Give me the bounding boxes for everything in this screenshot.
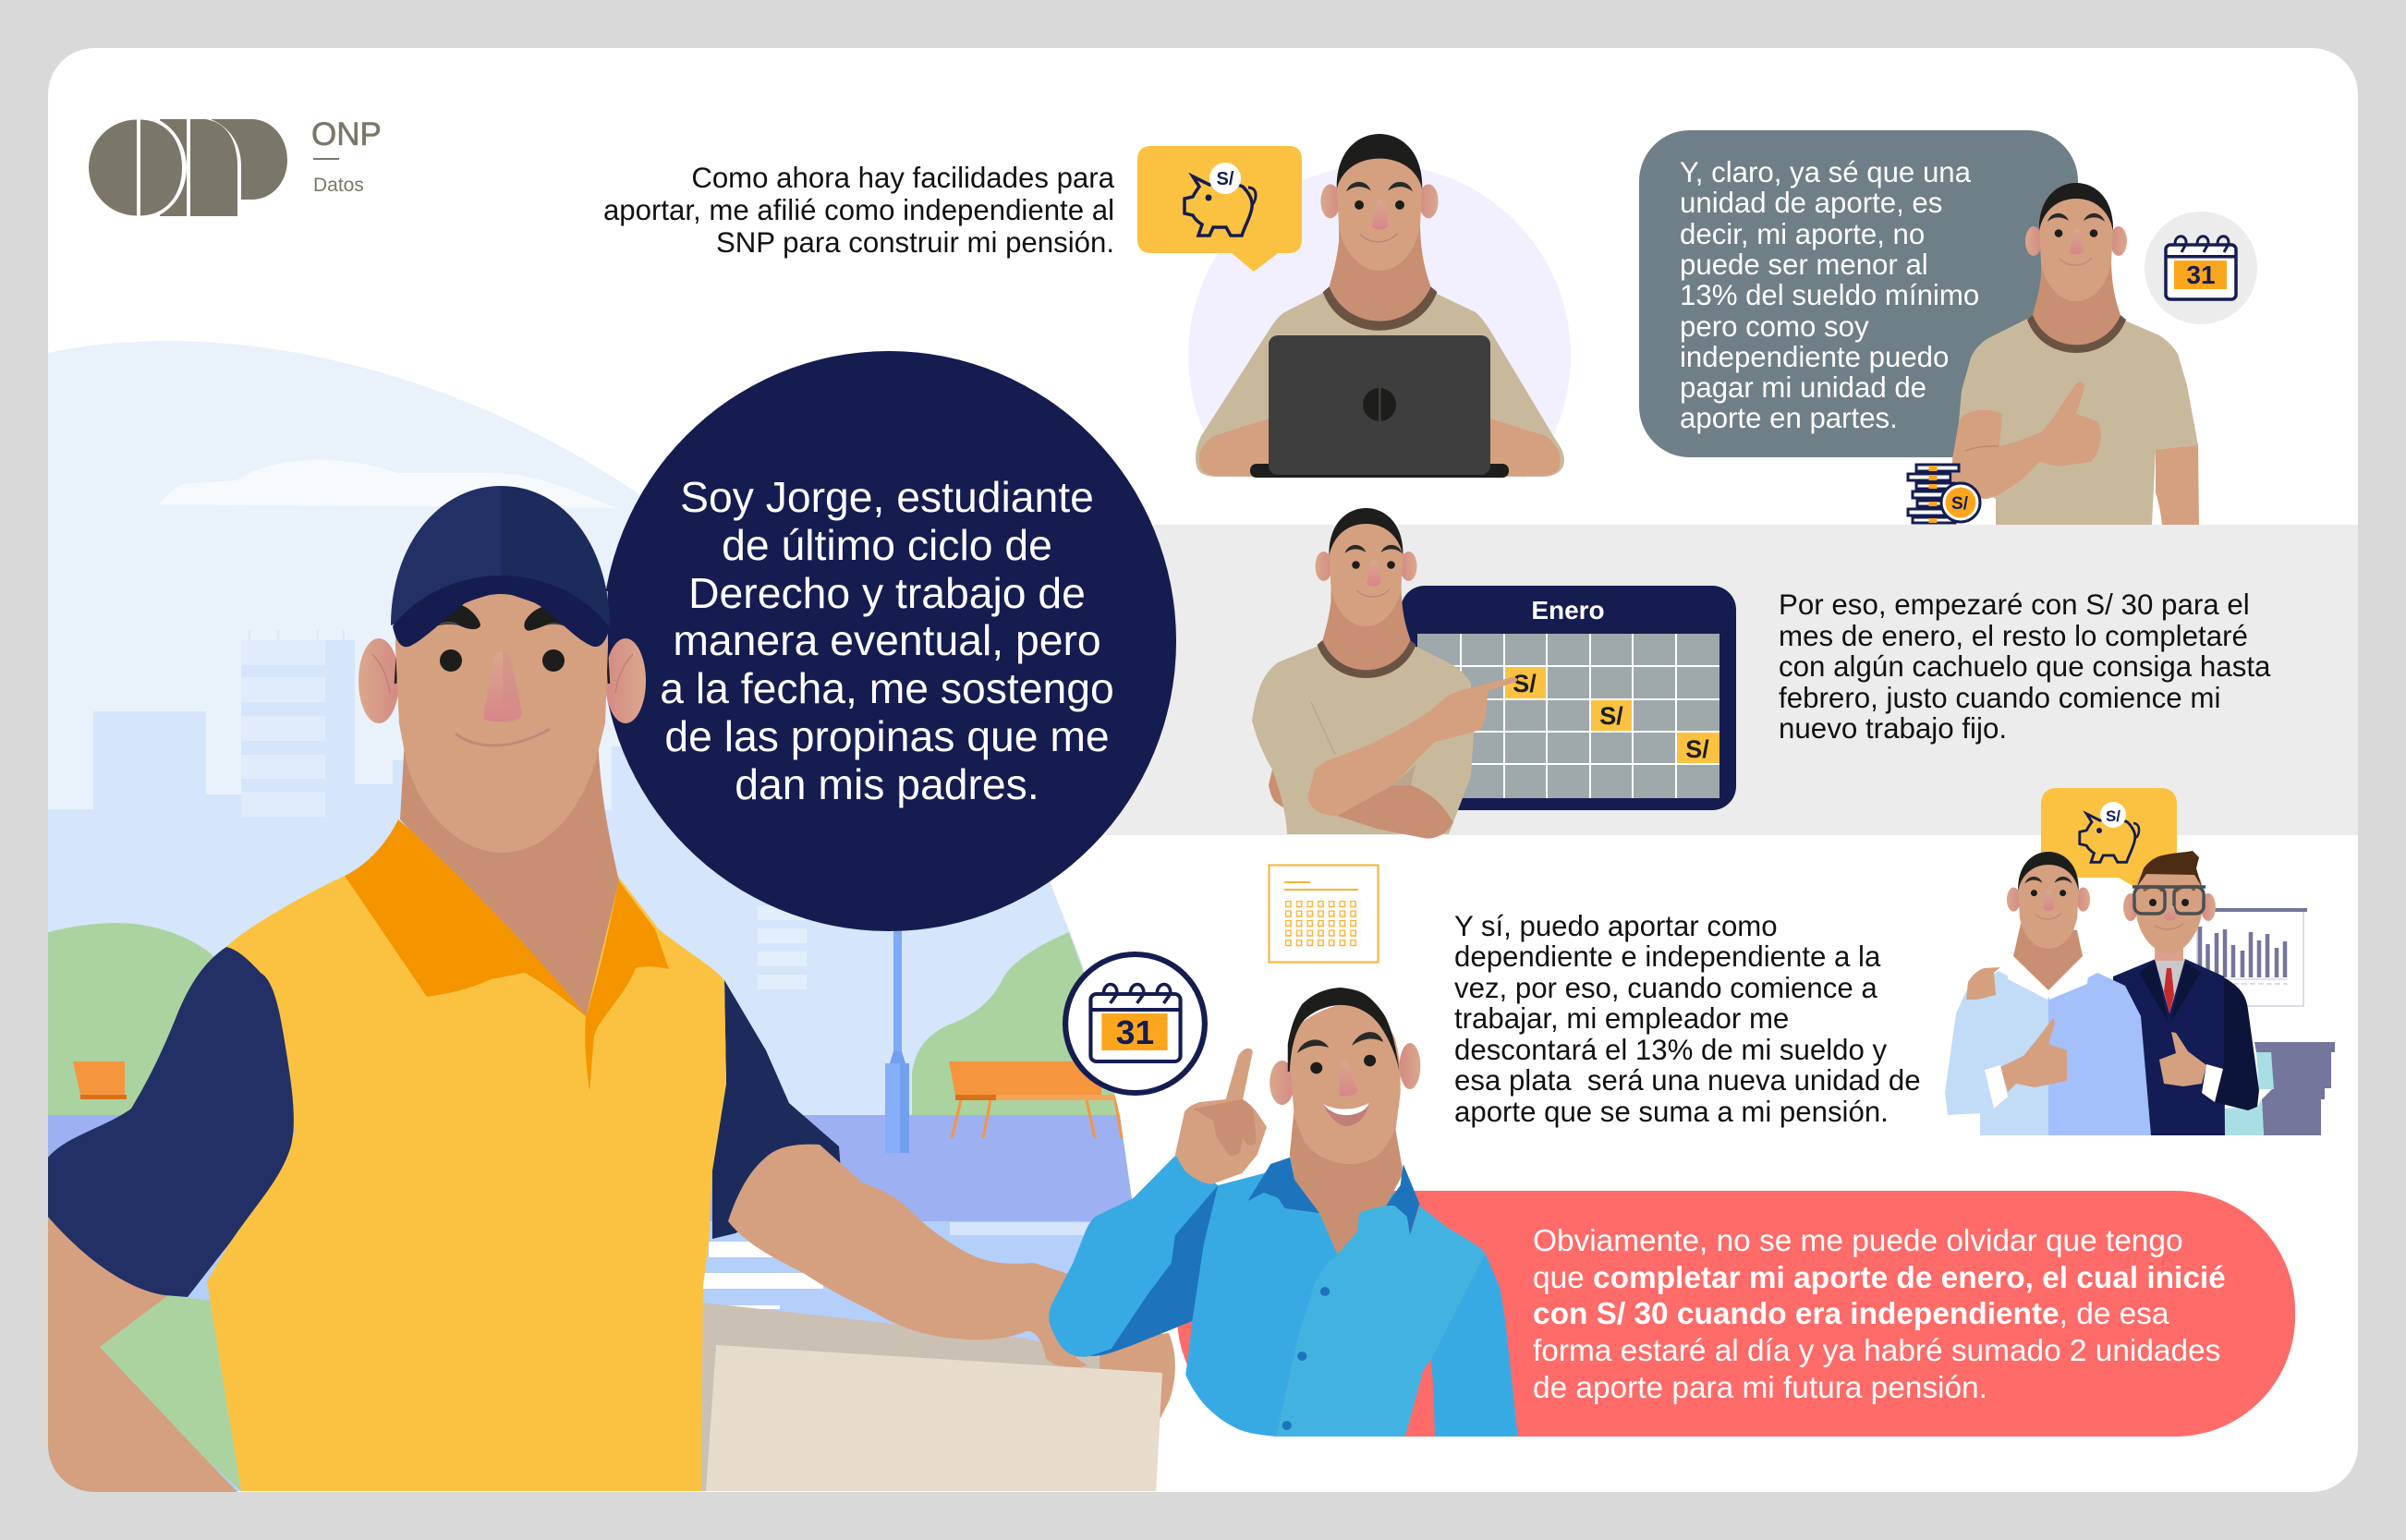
illustration: Jorge with employer [1945,788,2335,1135]
mouth [1323,1103,1369,1126]
neck [1290,1093,1404,1255]
eyes [2149,899,2157,906]
glasses [2134,887,2165,914]
nose [484,652,522,721]
text: plan for January: mes de enero, el resto lo completaré [1779,620,2248,652]
arms [1199,418,1269,476]
face [395,591,608,853]
callout: piggy bank speech bubble: S/ [1217,169,1234,189]
nose [1340,1060,1357,1097]
lapels [2139,961,2201,1023]
logo: ONP Datos: Datos [313,175,364,196]
icon: document with grid [1270,865,1379,963]
face [1290,1004,1401,1164]
thumbs up arm [1952,382,2101,499]
text: plan for January: Por eso, empezaré con S/ 30 para el [1779,588,2250,621]
man in light shirt [1945,852,2151,1135]
green ground [100,1295,241,1491]
text: plan for January: con algún cachuelo que consiga hasta [1779,650,2271,683]
callout: red conclusion panel [1177,1191,2295,1437]
head [2025,183,2127,353]
hair [2137,851,2202,887]
collar left [1247,1158,1319,1213]
collar [1999,958,2097,1000]
laptop [1250,335,1509,478]
callout: grey speech bubble: Y, claro, ya sé que una [1680,156,1972,188]
benches [73,1061,125,1096]
lower arm [1337,785,1453,839]
callout: piggy bubble: S/ [2106,807,2120,825]
head [2007,852,2090,949]
callout: red conclusion panel: Obviamente, no se me puede olvidar que tengo [1533,1224,2183,1258]
callout: navy intro circle [602,351,1176,931]
panel: January calendar: S/ [1685,735,1709,763]
illustration: Jorge in blue shirt pointing [1049,988,1518,1437]
icon: coins: S/ [1951,494,1969,514]
right arm [728,1145,1088,1368]
water [48,1115,1157,1221]
logo mark [89,115,287,220]
finger folds [1192,1099,1257,1156]
illustration: park scene background [48,314,1175,1498]
hand on shoulder [1966,967,2000,1000]
eyebrows [434,605,480,629]
callout: piggy bank speech bubble [1137,146,1302,272]
hair [1288,988,1400,1072]
pointing hand [1175,1049,1267,1184]
neck [400,739,619,1016]
right hand behind box [1100,1333,1175,1418]
callout: grey speech bubble: pagar mi unidad de [1680,371,1926,404]
text: intro to SNP: Como ahora hay facilidades para [691,162,1115,194]
sleeve shadow [1089,1185,1218,1356]
logo text: ONP [311,116,382,152]
desk [2225,1042,2335,1135]
mouth [456,729,550,746]
lamp post [893,924,902,1058]
illustration: Jorge thumbs up [1952,183,2199,525]
text: dependent and independent: Y sí, puedo aportar como [1454,910,1778,942]
cuff [1985,1065,2008,1109]
buttons [1320,1287,1330,1296]
face [2136,868,2202,953]
icon: calendar in navy ring: 31 [1116,1014,1154,1051]
text: dependent and independent: aporte que se suma a mi pensión. [1454,1096,1889,1128]
text: dependent and independent: trabajar, mi empleador me [1454,1002,1789,1035]
icon: calendar in grey circle [2145,212,2257,324]
callout: red conclusion panel: de aporte para mi futura pensión. [1533,1371,1987,1405]
callout: piggy bubble [2041,788,2177,889]
collar right [585,881,669,1091]
t-shirt [1959,319,2198,525]
text: dependent and independent: vez, por eso, cuando comience a [1454,972,1877,1004]
cuff [2202,1064,2223,1102]
left sleeve [1049,1156,1218,1357]
callout: grey speech bubble: independiente puedo [1680,341,1949,373]
panel: January calendar: S/ [1599,702,1623,730]
left arm [48,1216,242,1497]
shirt front [1276,1206,1486,1437]
shirt [207,876,726,1491]
text: plan for January: nuevo trabajo fijo. [1779,712,2007,745]
callout: red conclusion panel: con S/ 30 cuando era independiente, de esa [1533,1297,2169,1331]
man with tie [2113,851,2259,1135]
folded hand [1269,770,1306,810]
callout: grey speech bubble [1639,130,2078,457]
cap [391,486,610,647]
mouth [2155,924,2183,929]
t-shirt [1196,293,1564,477]
callout: navy intro circle: Soy Jorge, estudiante [680,473,1094,521]
collar right [1386,1164,1419,1235]
brows [1297,1032,1383,1053]
text: intro to SNP: aportar, me afilié como independiente al [603,194,1114,226]
left sleeve [47,947,294,1297]
sideburn lines [394,649,610,684]
callout: grey speech bubble: unidad de aporte, es [1680,187,1942,219]
thumbs up [2000,1018,2067,1092]
callout: navy intro circle: manera eventual, pero [673,616,1101,664]
text: plan for January: febrero, justo cuando comience mi [1779,682,2220,714]
text: dependent and independent: esa plata será una nueva unidad de [1454,1064,1921,1097]
callout: grey speech bubble: puede ser menor al [1680,249,1928,281]
calendar heading: Enero [1531,596,1605,624]
thumb [2159,1032,2206,1086]
suit [2113,959,2225,1135]
brows [2144,887,2194,891]
right arm [2156,443,2199,525]
callout: grey speech bubble: 13% del sueldo mínimo [1680,279,1979,311]
road [48,1221,1157,1498]
illustration: main character Jorge [47,486,1175,1497]
neck [2013,924,2083,990]
shirt body [1185,1158,1416,1437]
icon: calendar in navy ring [1065,954,1205,1093]
callout: navy intro circle: de último ciclo de [722,521,1052,569]
callout: red conclusion panel: forma estaré al día y ya habré sumado 2 unidades [1533,1334,2220,1368]
eyes [1310,1062,1322,1073]
text: dependent and independent: dependiente e independiente a la [1454,940,1881,973]
ears [1270,1061,1294,1105]
parcel box back [701,1303,1162,1491]
pointing arm [1308,677,1517,816]
right sleeve [1431,1254,1518,1437]
callout: navy intro circle: Derecho y trabajo de [688,569,1086,617]
panel: grey band [1016,525,2358,835]
calendar grid [1417,634,1719,798]
text: dependent and independent: descontará el 13% de mi sueldo y [1454,1034,1887,1066]
shirt crease [1311,702,1335,755]
illustration: Jorge with laptop [1188,134,1571,479]
chart board [2197,908,2307,1006]
icon: calendar in grey circle: 31 [2186,261,2216,289]
head [1316,508,1417,678]
nose [2164,905,2177,920]
head [1320,134,1439,331]
illustration: Jorge pointing at calendar [1252,508,1517,839]
ears [2123,893,2138,921]
right sleeve [712,980,841,1239]
skyline [93,711,206,809]
sleeve [2215,977,2259,1110]
logo: ONP Datos [89,115,382,220]
eyes [440,649,462,672]
t-shirt [1252,647,1474,834]
shirt left [1945,971,2048,1135]
collar left [345,819,586,1016]
bushes [48,923,213,1115]
callout: grey speech bubble: pero como soy [1680,310,1869,343]
ears [358,638,399,723]
callout: red conclusion panel: que completar mi aporte de enero, el cual inicié [1533,1261,2226,1295]
parcel box front [706,1345,1162,1491]
callout: grey speech bubble: decir, mi aporte, no [1680,218,1925,250]
callout: navy intro circle: dan mis padres. [735,760,1039,808]
callout: grey speech bubble: aporte en partes. [1680,402,1898,434]
icon: coins [1908,465,1980,523]
text: intro to SNP: SNP para construir mi pensión. [716,226,1114,259]
panel: January calendar: S/ [1513,670,1537,697]
callout: navy intro circle: a la fecha, me sostengo [660,664,1114,712]
shirt and tie [2155,959,2185,1013]
shirt right [2048,973,2151,1135]
callout: navy intro circle: de las propinas que me [664,712,1110,760]
panel: January calendar [1401,586,1736,810]
